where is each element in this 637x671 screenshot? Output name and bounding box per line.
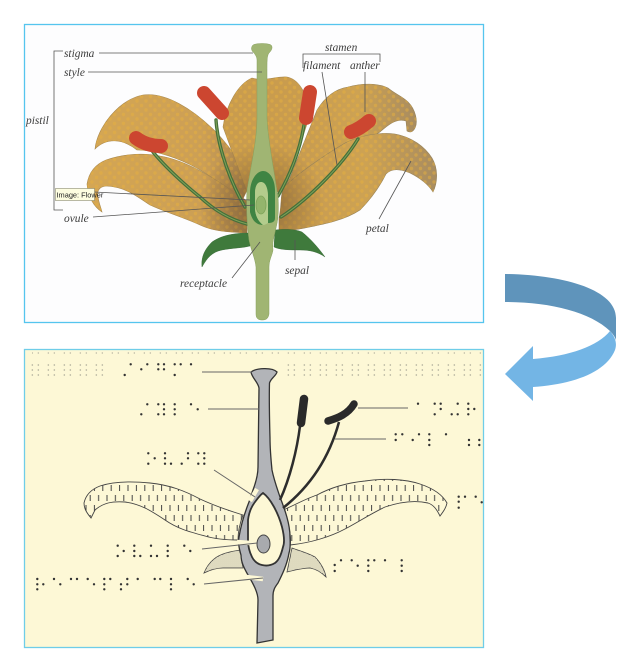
sepal: left [202,233,250,267]
braille label: receptacle [37,579,194,589]
petal: back right [287,84,416,185]
label: pistil: pistil [25,115,49,127]
sepal: tactile right [287,548,326,577]
label: style: style [64,67,85,79]
braille label: ovule [118,546,190,556]
petal: front right [279,133,437,231]
label: receptacle: receptacle [180,278,227,290]
ovary [250,171,275,225]
panel: tactile braille diagram [24,350,484,648]
anthers: tactile [301,399,354,423]
label: stigma: stigma [64,48,95,60]
petal: tactile left [84,482,243,540]
sepal: tactile left [204,550,243,573]
braille label: style [141,404,198,414]
sepal: right [274,229,325,257]
petal: back centre [223,77,311,200]
tooltip: Image: Flower: Image: Flower [56,190,104,200]
pistil: tactile body [239,369,290,643]
faint braille rows [32,352,482,376]
braille label: petal [459,497,482,508]
label: sepal: sepal [285,265,309,277]
braille label: filament [396,434,479,445]
label: petal: petal [365,223,389,235]
petal: tactile right [283,479,447,545]
white label gaps [237,489,263,579]
leader lines: tactile [202,372,408,584]
filaments: tactile [280,422,339,508]
braille label: anther [418,404,474,414]
ovary cavity [248,493,284,566]
braille label: ovary [148,453,204,464]
braille label: sepal [335,560,402,571]
panel: colour flower diagram [24,24,484,322]
petal: back left [95,95,250,205]
leader lines [54,51,411,278]
petal: front left [87,154,247,233]
label: anther: anther [350,60,380,72]
arrow: curved blue arrow from top panel to bottom panel [505,274,616,401]
anthers [136,92,369,146]
label: stamen: stamen [325,42,358,54]
ovule [257,535,270,553]
pistil stem [247,44,278,320]
filaments [153,120,358,224]
petal shading near the centre [208,152,316,233]
label: filament: filament [303,60,341,72]
braille label: stigma [125,364,191,375]
label: ovule: ovule [64,213,89,225]
